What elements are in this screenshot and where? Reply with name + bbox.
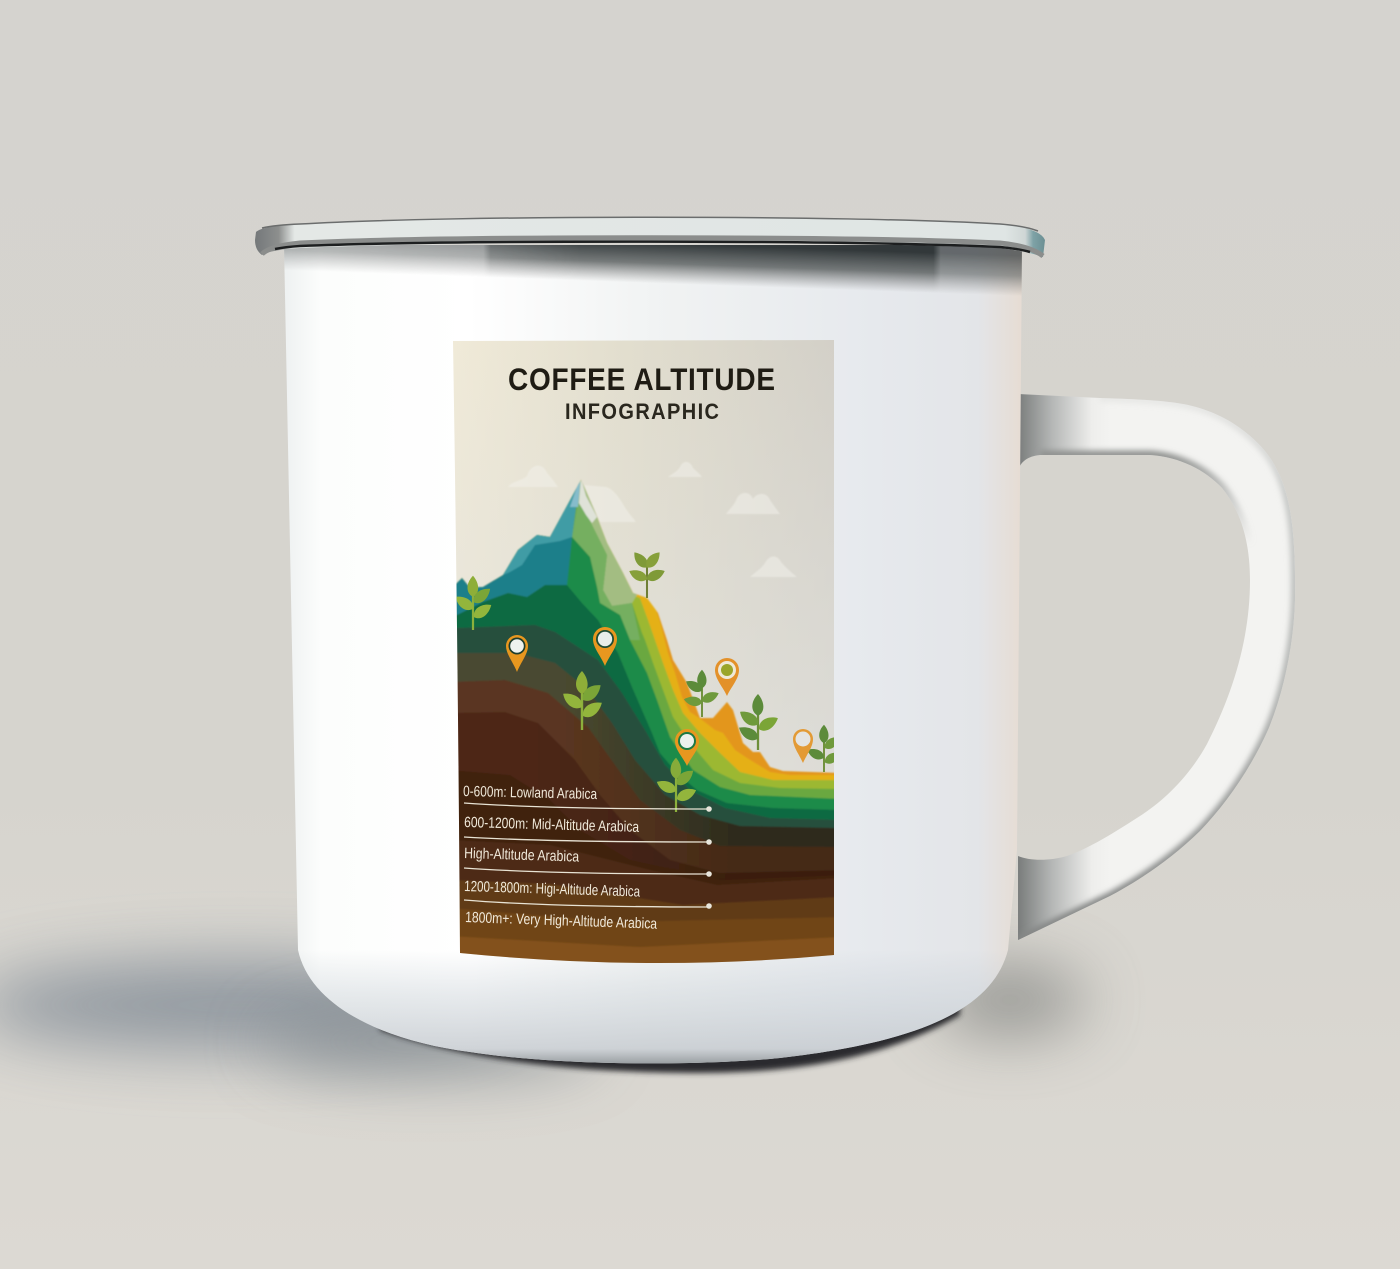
layer: base brown — [460, 936, 834, 963]
legend row 2: 600-1200m: Mid-Altitude Arabica — [464, 814, 640, 836]
pin 4 — [675, 729, 699, 766]
legend row 1: 0-600m: Lowland Arabica — [463, 783, 598, 803]
mug body — [280, 240, 1030, 1070]
mountain and soil layers — [450, 470, 840, 980]
plant C — [629, 552, 665, 598]
layer: green — [566, 537, 834, 811]
plant E — [683, 670, 721, 717]
layer: lime slope — [631, 596, 834, 790]
pin 3 — [715, 658, 739, 696]
layer: teal peak — [456, 507, 573, 616]
plant F — [739, 694, 778, 750]
plant G — [808, 724, 834, 772]
legend row 3 — [464, 845, 712, 877]
legend row 2 — [464, 814, 712, 845]
plant B — [563, 671, 602, 730]
panel: infographic label — [450, 338, 843, 980]
subtitle: INFOGRAPHIC — [565, 400, 719, 424]
layer: orange slope — [637, 594, 834, 776]
pin 5 — [793, 729, 813, 763]
layer: mid brown — [460, 880, 834, 922]
layer: warm brown — [460, 909, 834, 946]
altitude legend — [463, 783, 712, 933]
layer: dark core — [458, 771, 827, 885]
legend row 3: High-Altitude Arabica — [464, 845, 580, 866]
layer: soft green face — [572, 503, 640, 640]
layer: deep green soil — [457, 624, 834, 828]
layer: dark green — [456, 580, 834, 820]
layer: olive soil — [457, 652, 834, 848]
layer: lighter teal ridge — [504, 492, 576, 575]
layer: pale green ridge — [578, 481, 638, 606]
layer: deep brown — [459, 840, 834, 905]
mug handle — [1018, 394, 1295, 940]
layer: red brown soil — [458, 712, 834, 880]
plant D — [654, 758, 698, 812]
layer: ice blue summit — [570, 482, 581, 508]
ground shadow — [0, 961, 1085, 1073]
pin 2 — [593, 627, 617, 666]
legend row 5: 1800m+: Very High-Altitude Arabica — [465, 909, 658, 933]
layer: yellow slope — [636, 594, 834, 780]
plant A — [456, 576, 492, 630]
title: COFFEE ALTITUDE — [508, 362, 775, 397]
metal rim — [255, 217, 1045, 257]
layer: brown soil — [458, 680, 834, 874]
layer: light green slope — [462, 506, 834, 800]
mug mockup scene — [0, 216, 1295, 1106]
clouds — [508, 462, 797, 577]
legend row 4: 1200-1800m: Higi-Altitude Arabica — [464, 878, 641, 901]
pin 1 — [506, 635, 528, 672]
layer: summit snow — [579, 478, 597, 523]
legend row 1 — [463, 783, 712, 812]
